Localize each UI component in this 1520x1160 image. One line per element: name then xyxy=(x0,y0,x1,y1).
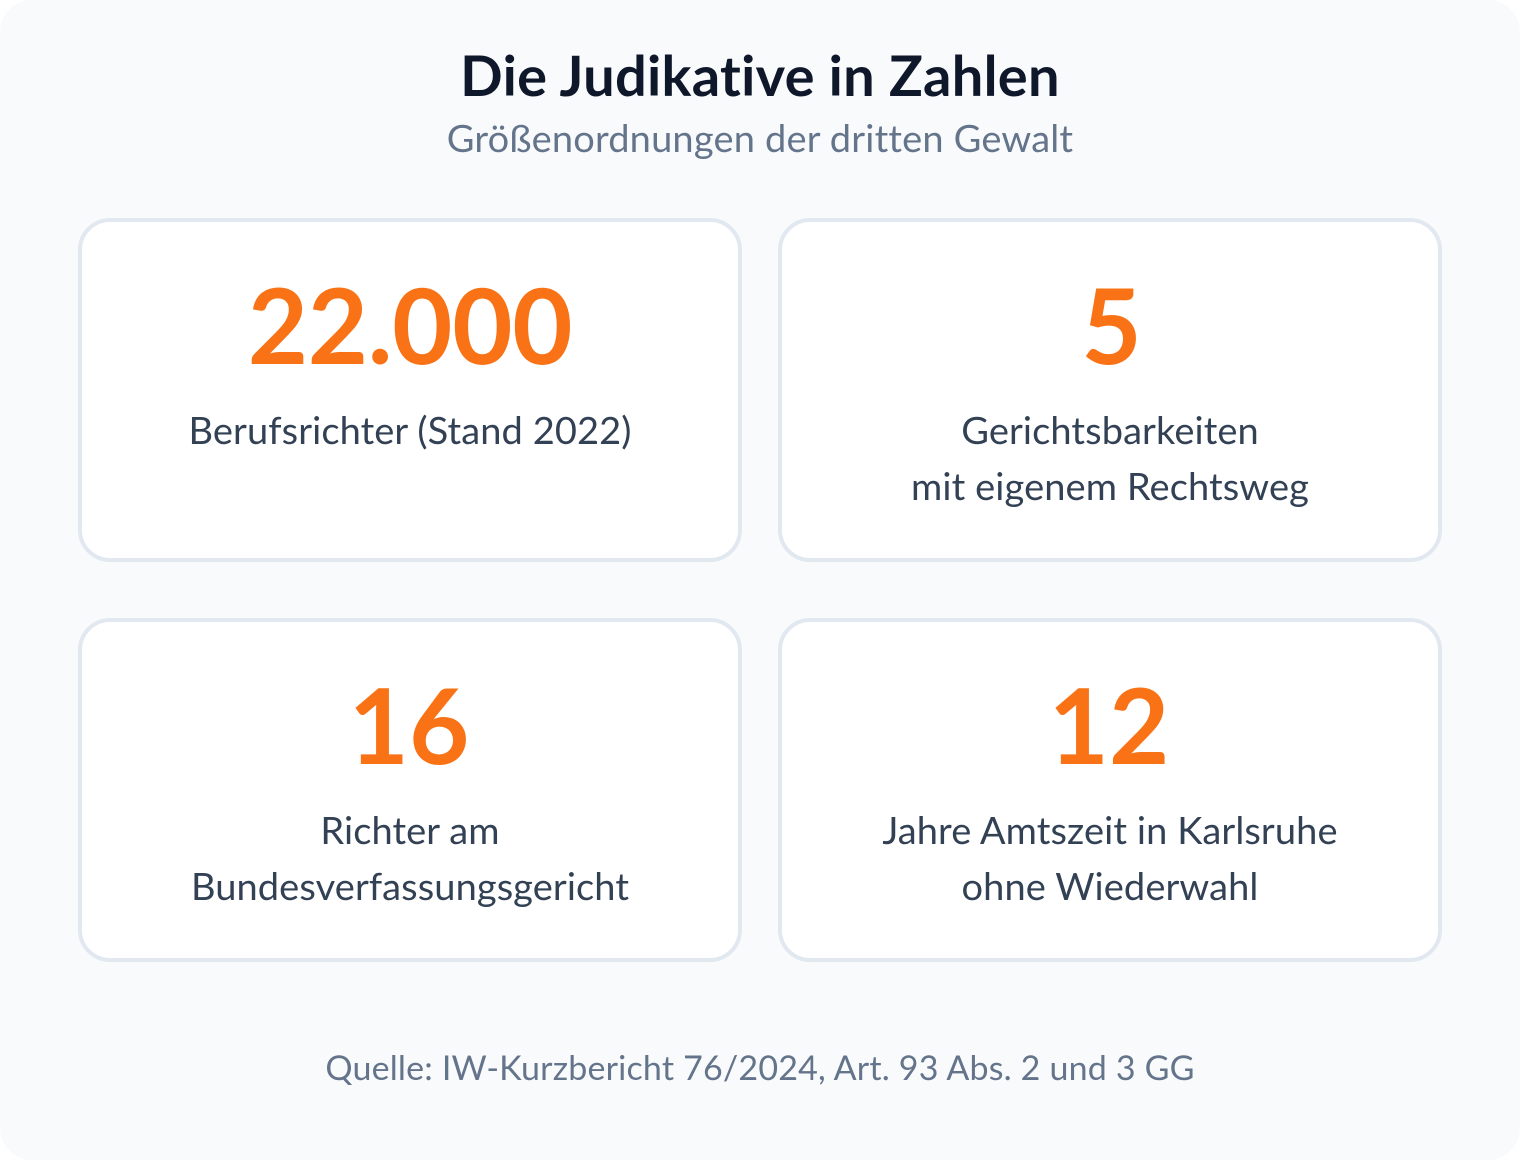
label: Gerichtsbarkeiten xyxy=(911,407,1309,509)
label: Amtszeit: ohne Wiederwahl xyxy=(962,863,1258,909)
label: Amtszeit: Jahre Amtszeit in Karlsruhe xyxy=(882,807,1338,853)
number: 5: 5 xyxy=(1081,262,1142,387)
number: 22.000: 22.000 xyxy=(248,262,572,387)
title: Die Judikative in Zahlen xyxy=(460,41,1060,108)
label: Gerichtsbarkeiten: Gerichtsbarkeiten xyxy=(961,407,1259,453)
label: Richter am Bundesverfassungsgericht: Richter am xyxy=(320,807,500,853)
label: Amtszeit xyxy=(882,807,1338,909)
panel: Gerichtsbarkeiten xyxy=(778,218,1442,562)
number: 12: 12 xyxy=(1049,662,1169,787)
label: Berufsrichter: Berufsrichter (Stand 2022) xyxy=(188,407,632,453)
panel: Amtszeit xyxy=(778,618,1442,962)
source note: Quelle: IW-Kurzbericht 76/2024, Art. 93 Abs. 2 und 3 GG xyxy=(325,1047,1195,1088)
label: Gerichtsbarkeiten: mit eigenem Rechtsweg xyxy=(911,463,1309,509)
label: Richter am Bundesverfassungsgericht xyxy=(191,807,629,909)
subtitle: Größenordnungen der dritten Gewalt xyxy=(447,115,1073,161)
label: Richter am Bundesverfassungsgericht: Bundesverfassungsgericht xyxy=(191,863,629,909)
panel: Berufsrichter xyxy=(78,218,742,562)
number: 16: 16 xyxy=(349,662,469,787)
panel: Richter am Bundesverfassungsgericht xyxy=(78,618,742,962)
